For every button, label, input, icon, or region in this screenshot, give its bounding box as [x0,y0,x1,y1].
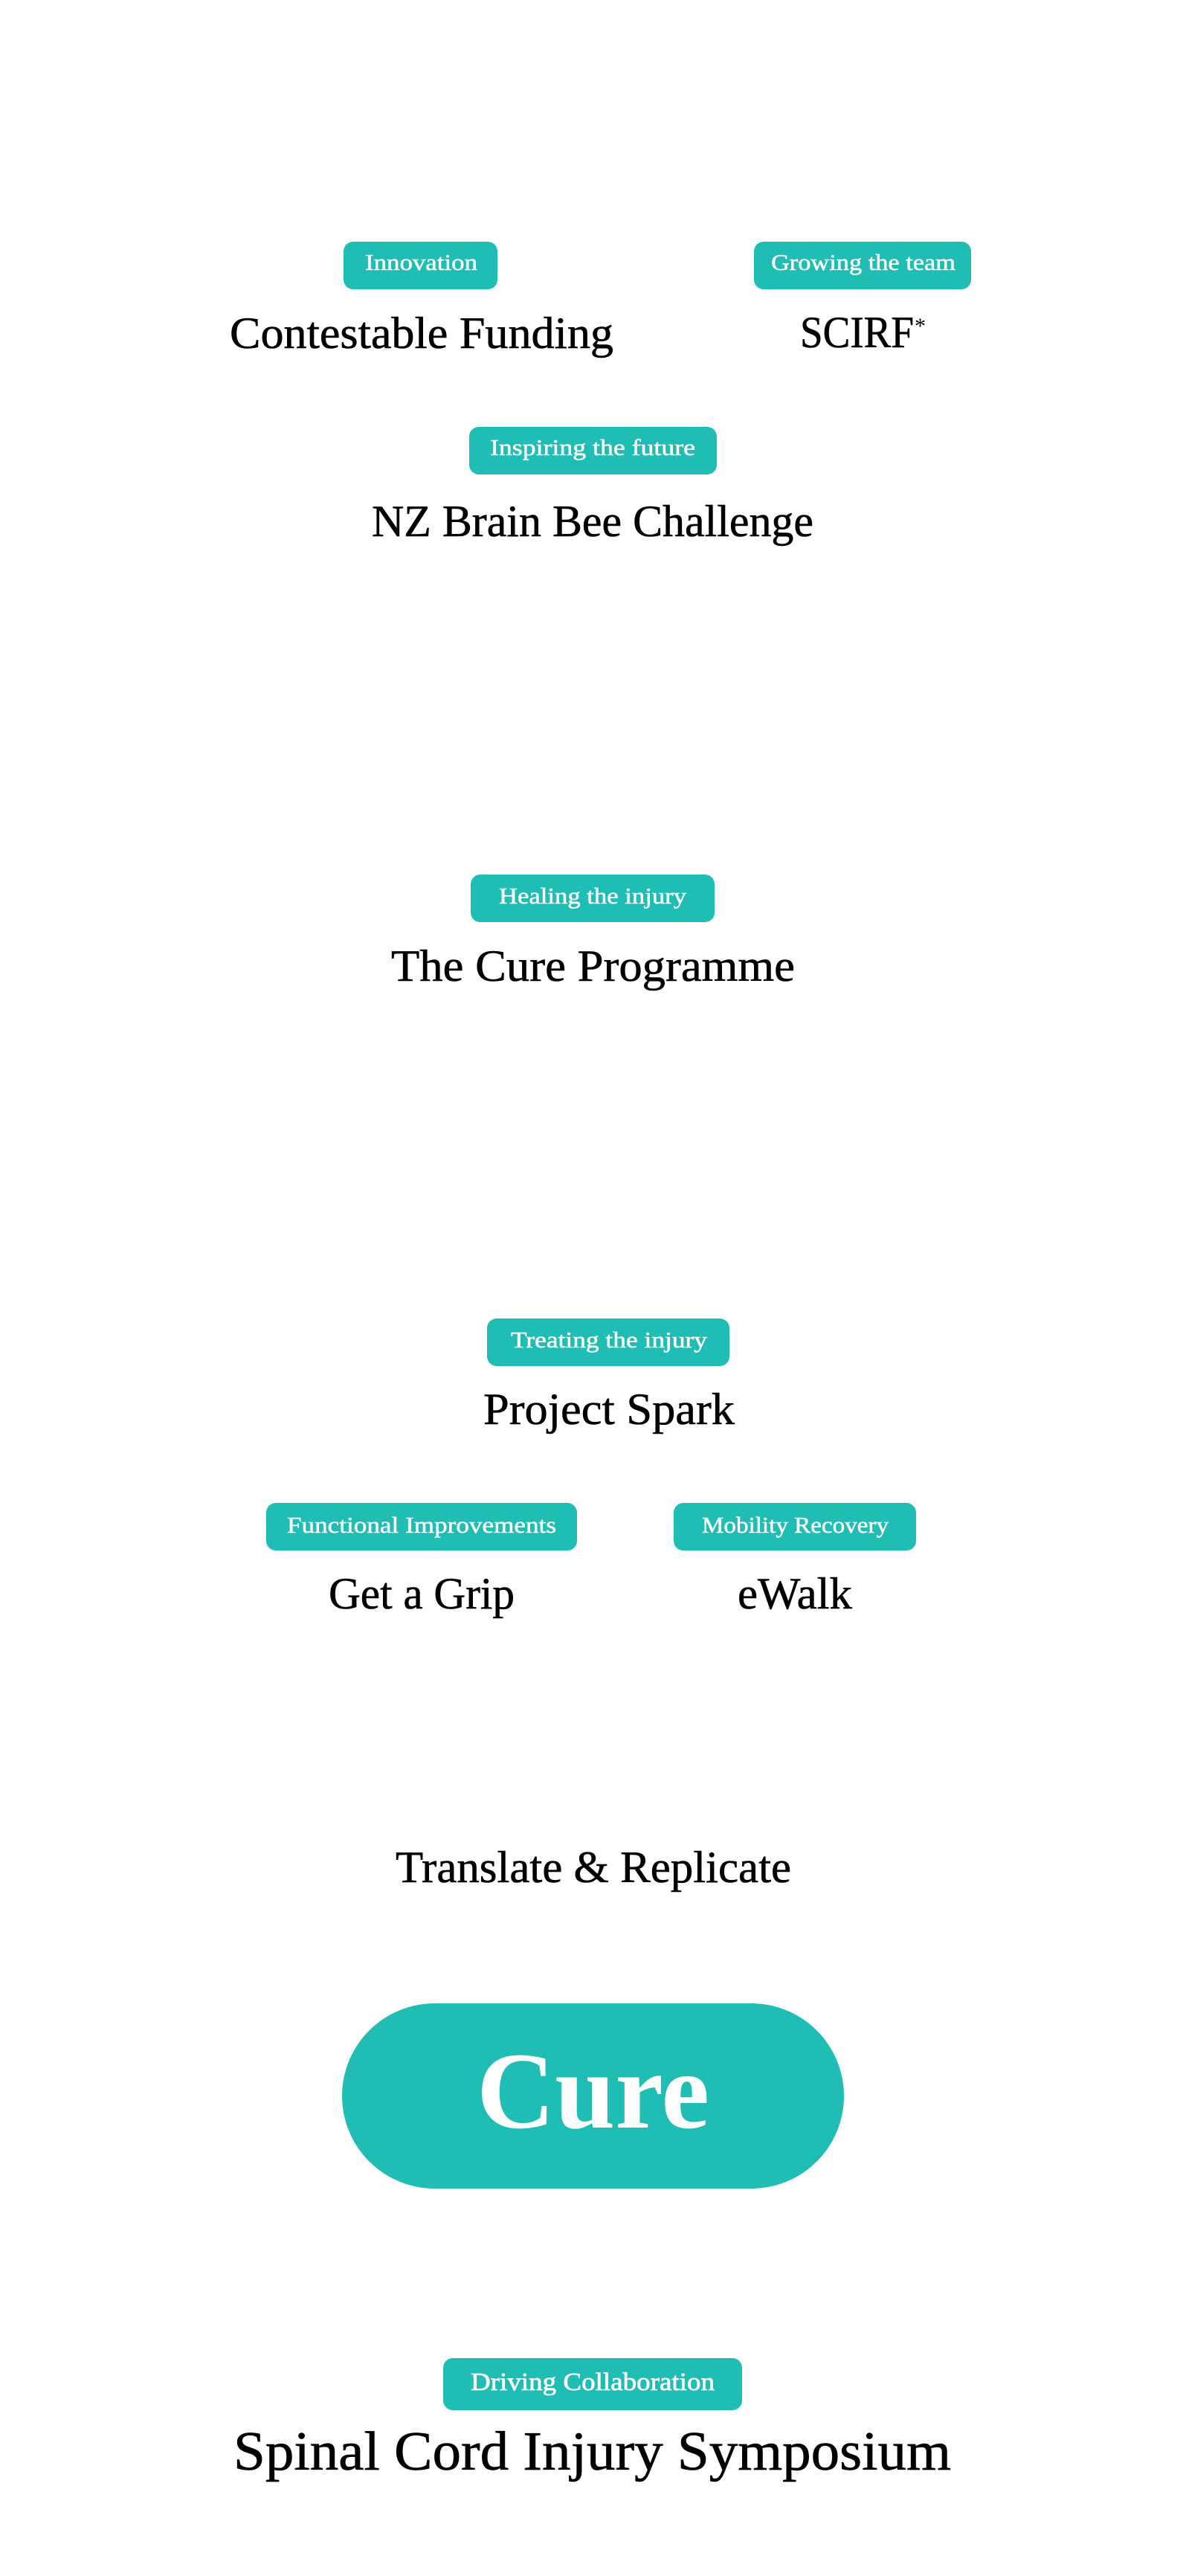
heading: eWalk: eWalk [738,1569,852,1618]
badge: Inspiring the future [469,427,717,474]
panel: SCIRF [754,242,971,357]
badge: Growing the team [754,242,971,289]
heading: SCIRF: SCIRF [800,308,914,357]
badge: Mobility Recovery [674,1503,916,1551]
badge: Functional Improvements [266,1503,577,1551]
heading: SCIRF: * [915,314,926,338]
badge: Treating the injury [487,1318,729,1366]
panel: Project Spark [483,1318,735,1434]
panel: Contestable Funding [230,242,613,358]
badge: Functional Improvements: Functional Improvements [287,1512,556,1538]
badge: Mobility Recovery: Mobility Recovery [702,1512,889,1538]
pill: Cure: Cure [477,2030,709,2151]
badge: Driving Collaboration [443,2358,742,2410]
badge: Innovation: Innovation [365,249,478,275]
heading: NZ Brain Bee Challenge: NZ Brain Bee Challenge [372,497,813,546]
panel: Spinal Cord Injury Symposium [233,2358,951,2482]
heading: Get a Grip: Get a Grip [329,1569,515,1618]
badge: Inspiring the future: Inspiring the future [490,434,695,460]
heading: Spinal Cord Injury Symposium: Spinal Cord Injury Symposium [233,2421,951,2482]
heading: Translate & Replicate: Translate & Replicate [396,1843,791,1892]
panel: The Cure Programme [391,875,795,991]
badge: Healing the injury: Healing the injury [499,883,687,909]
badge: Growing the team: Growing the team [771,249,955,275]
heading: Contestable Funding: Contestable Funding [230,309,613,358]
heading: The Cure Programme: The Cure Programme [391,941,795,991]
panel: Get a Grip [266,1503,577,1618]
badge: Healing the injury [471,875,715,922]
badge: Driving Collaboration: Driving Collaboration [471,2369,715,2396]
badge: Innovation [344,242,497,289]
badge: Treating the injury: Treating the injury [511,1327,708,1353]
pill: Cure [342,2003,844,2189]
panel: NZ Brain Bee Challenge [372,427,813,546]
panel: eWalk [674,1503,916,1618]
heading: Project Spark: Project Spark [483,1385,735,1434]
